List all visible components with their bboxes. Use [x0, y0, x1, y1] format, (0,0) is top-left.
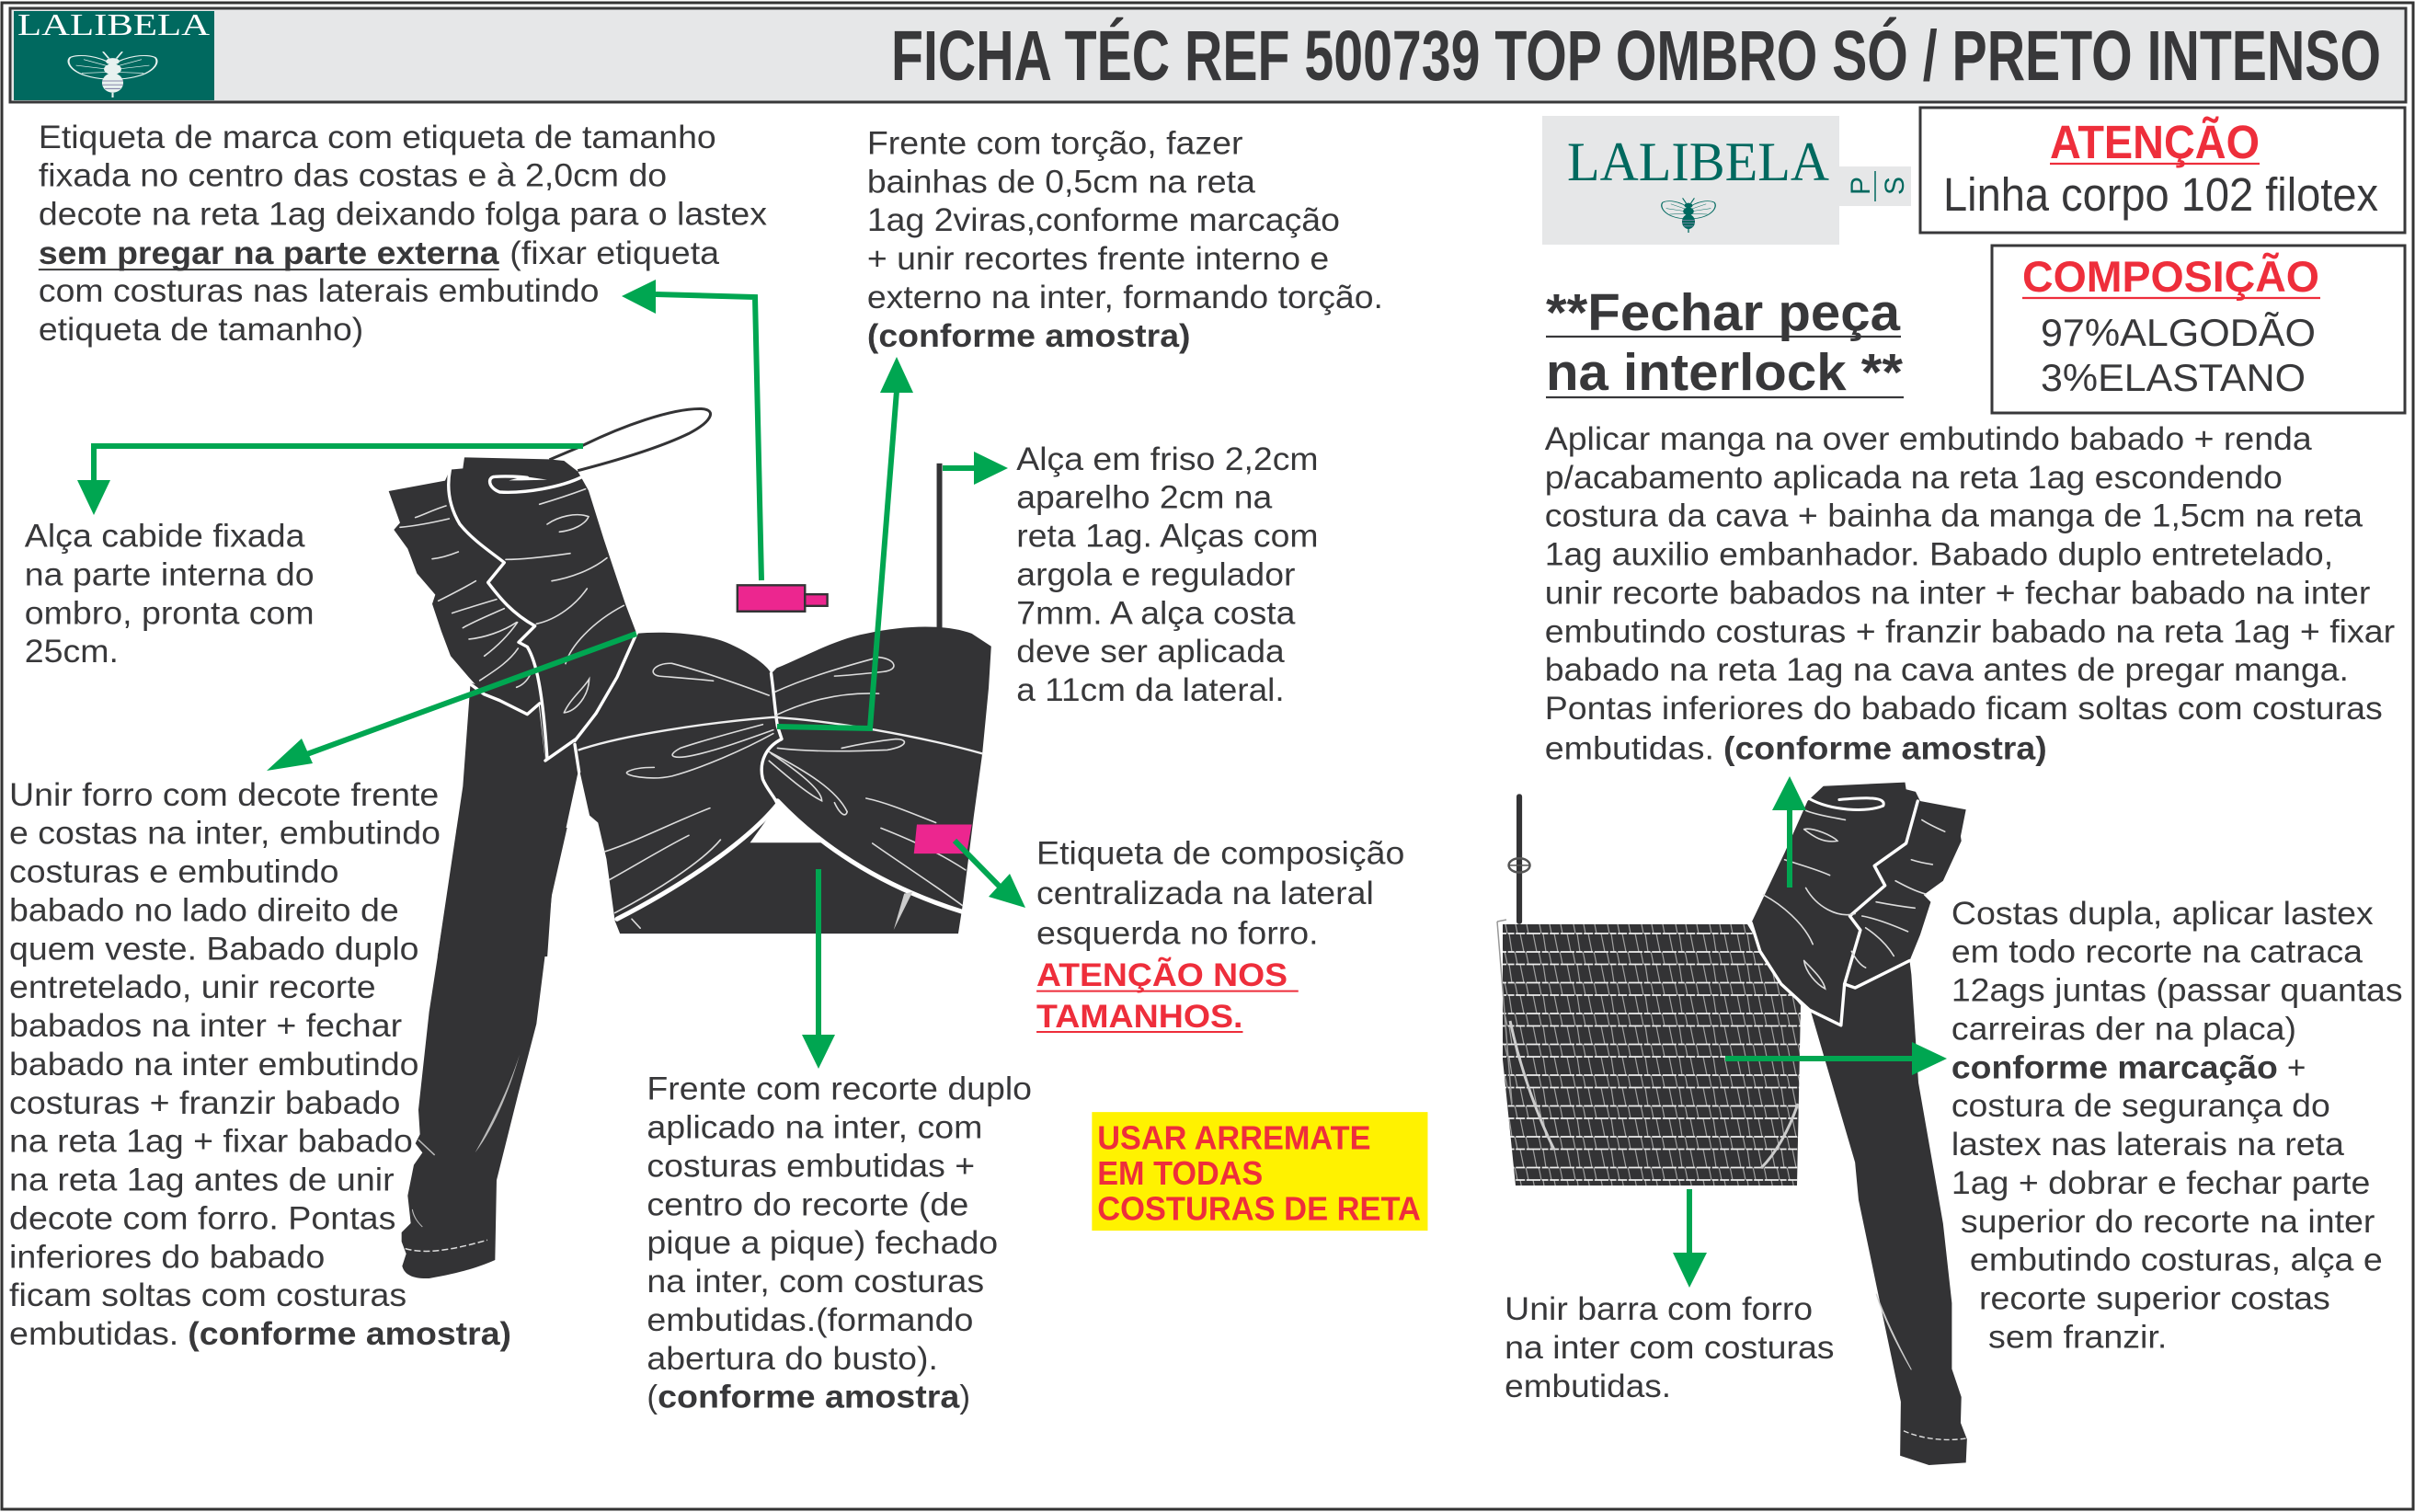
arrow: sleeve top [1772, 776, 1806, 888]
text: etiqueta de composição: centralizada na lateral [1036, 876, 1374, 911]
text: etiqueta de marca: (fixar etiqueta [509, 235, 720, 271]
text: etiqueta de composição: ATENÇÃO NOS [1036, 957, 1288, 993]
text: etiqueta de marca: Etiqueta de marca com etiqueta de tamanho [39, 120, 716, 155]
text: aplicar manga: (conforme amostra) [1723, 731, 2047, 767]
text: frente com recorte: ( [647, 1380, 658, 1415]
text: frente com recorte: embutidas.(formando [647, 1302, 973, 1338]
brand label [1542, 116, 1911, 245]
text: costas dupla: 1ag + dobrar e fechar parte [1951, 1165, 2370, 1201]
arrow: strap [943, 452, 1008, 485]
text: aplicar manga: costura da cava + bainha da manga de 1,5cm na reta [1545, 498, 2363, 534]
text: alça em friso: aparelho 2cm na [1016, 480, 1273, 516]
text: frente com torção: 1ag 2viras,conforme marcação [867, 202, 1340, 238]
front bodice [574, 464, 991, 934]
back strap [1509, 783, 1967, 1465]
text: costas dupla [1951, 896, 2403, 1355]
text: frente com recorte: aplicado na inter, com [647, 1110, 982, 1146]
text: alça em friso: 7mm. A alça costa [1016, 595, 1296, 631]
text: unir forro [9, 777, 511, 1352]
text: etiqueta de composição: Etiqueta de composição [1036, 836, 1404, 872]
text: aplicar manga: unir recorte babados na inter + fechar babado na inter [1545, 575, 2371, 611]
text: etiqueta de marca: com costuras nas laterais embutindo [39, 273, 599, 309]
text: costas dupla: lastex nas laterais na reta [1951, 1127, 2344, 1163]
text: aplicar manga: Pontas inferiores do babado ficam soltas com costuras [1545, 691, 2383, 727]
text: alça cabide: Alça cabide fixada [25, 519, 305, 555]
hanger loop [549, 408, 711, 471]
text: frente com torção: Frente com torção, fazer [867, 125, 1243, 161]
text: alça em friso: deve ser aplicada [1016, 634, 1285, 670]
text: unir barra: embutidas. [1505, 1369, 1671, 1404]
back ruffle [1751, 783, 1966, 1026]
arrow: hem [1673, 1189, 1707, 1288]
brand label: LALIBELA [1567, 132, 1829, 192]
panel: composição: 3%ELASTANO [2041, 356, 2306, 399]
text: unir forro: na reta 1ag + fixar babado [9, 1124, 413, 1160]
brand label: S [1880, 177, 1910, 195]
text: frente com recorte: pique a pique) fechado [647, 1225, 998, 1261]
text: unir forro: na reta 1ag antes de unir [9, 1163, 395, 1198]
text: alça cabide: 25cm. [25, 634, 119, 670]
text: unir forro: Unir forro com decote frente [9, 777, 439, 813]
panel: atenção: Linha corpo 102 filotex [1943, 168, 2378, 221]
text: costas dupla: carreiras der na placa) [1951, 1011, 2296, 1047]
text: alça em friso: argola e regulador [1016, 556, 1296, 592]
text: frente com recorte: costuras embutidas + [647, 1148, 975, 1184]
text: costas dupla: sem franzir. [1988, 1319, 2167, 1355]
arrow: hanger [77, 446, 583, 515]
arrow: torção [777, 357, 913, 728]
back garment drawing [1497, 783, 1967, 1465]
text: aplicar manga: 1ag auxilio embanhador. Babado duplo entretelado, [1545, 537, 2333, 573]
text: costas dupla: embutindo costuras, alça e [1970, 1243, 2383, 1278]
text: frente com recorte: ) [959, 1380, 970, 1415]
header logo: LALIBELA [17, 8, 211, 42]
text: frente com recorte [647, 1071, 1032, 1415]
callout: usar arremate: EM TODAS [1097, 1154, 1263, 1192]
text: frente com torção: (conforme amostra) [867, 318, 1191, 354]
arrow: neckline lining [267, 634, 636, 771]
text: etiqueta de marca: decote na reta 1ag deixando folga para o lastex [39, 197, 767, 233]
text: frente com torção: + unir recortes frente interno e [867, 241, 1329, 277]
text: costas dupla: costura de segurança do [1951, 1088, 2330, 1124]
panel: atenção: ATENÇÃO [2050, 115, 2260, 168]
text: alça em friso: a 11cm da lateral. [1016, 672, 1285, 708]
callout: usar arremate [1092, 1112, 1427, 1231]
text: aplicar manga: Aplicar manga na over embutindo babado + renda [1545, 421, 2312, 457]
callout: usar arremate: USAR ARREMATE [1097, 1118, 1370, 1156]
text: costas dupla: em todo recorte na catraca [1951, 934, 2363, 970]
text: unir barra: Unir barra com forro [1505, 1291, 1813, 1327]
arrow: composition label [955, 841, 1025, 908]
text: etiqueta de marca: fixada no centro das costas e à 2,0cm do [39, 158, 667, 194]
text: aplicar manga: embutindo costuras + franzir babado na reta 1ag + fixar [1545, 613, 2395, 649]
text: frente com recorte: conforme amostra [658, 1380, 960, 1415]
text: unir forro: babados na inter + fechar [9, 1008, 402, 1044]
text: etiqueta de composição [1036, 836, 1404, 1035]
text: unir forro: e costas na inter, embutindo [9, 816, 441, 852]
text: costas dupla: recorte superior costas [1979, 1280, 2330, 1316]
brand label: P [1846, 177, 1876, 195]
text: alça cabide: na parte interna do [25, 556, 315, 592]
arrow: lower front [802, 869, 835, 1069]
composition tag marker [914, 824, 972, 853]
text: frente com torção: bainhas de 0,5cm na reta [867, 164, 1255, 200]
text: etiqueta de composição: esquerda no forro. [1036, 916, 1319, 952]
text: frente com recorte: Frente com recorte duplo [647, 1071, 1032, 1107]
text: unir forro: ficam soltas com costuras [9, 1277, 406, 1313]
text: costas dupla: Costas dupla, aplicar lastex [1951, 896, 2374, 932]
text: costas dupla: + [2287, 1049, 2306, 1085]
text: etiqueta de marca [39, 120, 767, 348]
text: etiqueta de marca: sem pregar na parte externa [39, 235, 499, 271]
panel: composição: COMPOSIÇÃO [2022, 252, 2319, 301]
front ruffle [389, 457, 637, 761]
text: alça cabide: ombro, pronta com [25, 595, 315, 631]
heading: fechar peça na interlock [1546, 283, 1904, 402]
heading: fechar peça na interlock: na interlock ** [1546, 343, 1904, 402]
text: unir forro: entretelado, unir recorte [9, 969, 376, 1005]
text: unir forro: inferiores do babado [9, 1239, 325, 1275]
strap [937, 464, 943, 629]
panel: atenção [1920, 108, 2405, 233]
arrow: back panel [1725, 1042, 1947, 1075]
text: unir forro: costuras + franzir babado [9, 1085, 400, 1121]
callout: usar arremate: COSTURAS DE RETA [1097, 1189, 1421, 1227]
text: unir forro: costuras e embutindo [9, 854, 338, 890]
text: alça em friso: Alça em friso 2,2cm [1016, 441, 1319, 477]
text: etiqueta de composição: TAMANHOS. [1036, 999, 1242, 1035]
back sleeve [1811, 960, 1967, 1465]
text: aplicar manga [1545, 421, 2395, 767]
text: etiqueta de marca: etiqueta de tamanho) [39, 312, 363, 348]
text: costas dupla: 12ags juntas (passar quantas [1951, 973, 2403, 1009]
panel: composição [1992, 246, 2405, 413]
text: frente com recorte: centro do recorte (de [647, 1186, 968, 1222]
text: frente com torção: externo na inter, formando torção. [867, 280, 1383, 315]
front garment drawing [389, 408, 991, 1278]
text: unir forro: embutidas. [9, 1316, 178, 1352]
header band [10, 8, 2406, 102]
text: alça em friso: reta 1ag. Alças com [1016, 519, 1319, 555]
front sleeve [402, 682, 578, 1278]
text: frente com torção [867, 125, 1383, 354]
text: unir forro: decote com forro. Pontas [9, 1200, 395, 1236]
brand tag marker [738, 585, 828, 612]
header logo [14, 8, 214, 100]
text: unir forro: babado na inter embutindo [9, 1047, 419, 1082]
text: unir barra: na inter com costuras [1505, 1330, 1835, 1366]
text: frente com recorte: na inter, com costuras [647, 1264, 984, 1300]
text: costas dupla: superior do recorte na inter [1961, 1204, 2375, 1240]
back netted panel [1503, 924, 1801, 1186]
text: frente com recorte: abertura do busto). [647, 1341, 938, 1377]
text: unir forro: quem veste. Babado duplo [9, 931, 419, 967]
text: aplicar manga: embutidas. [1545, 731, 1714, 767]
text: unir forro: (conforme amostra) [188, 1316, 511, 1352]
heading: fechar peça na interlock: **Fechar peça [1546, 283, 1901, 342]
text: costas dupla: conforme marcação [1951, 1049, 2278, 1085]
panel: composição: 97%ALGODÃO [2041, 311, 2316, 354]
text: aplicar manga: babado na reta 1ag na cava antes de pregar manga. [1545, 652, 2349, 688]
text: alça cabide [25, 519, 315, 670]
arrow: brand label [622, 280, 761, 580]
text: alça em friso [1016, 441, 1319, 708]
text: aplicar manga: p/acabamento aplicada na reta 1ag escondendo [1545, 460, 2283, 496]
text: unir forro: babado no lado direito de [9, 892, 399, 928]
text: unir barra [1505, 1291, 1835, 1404]
